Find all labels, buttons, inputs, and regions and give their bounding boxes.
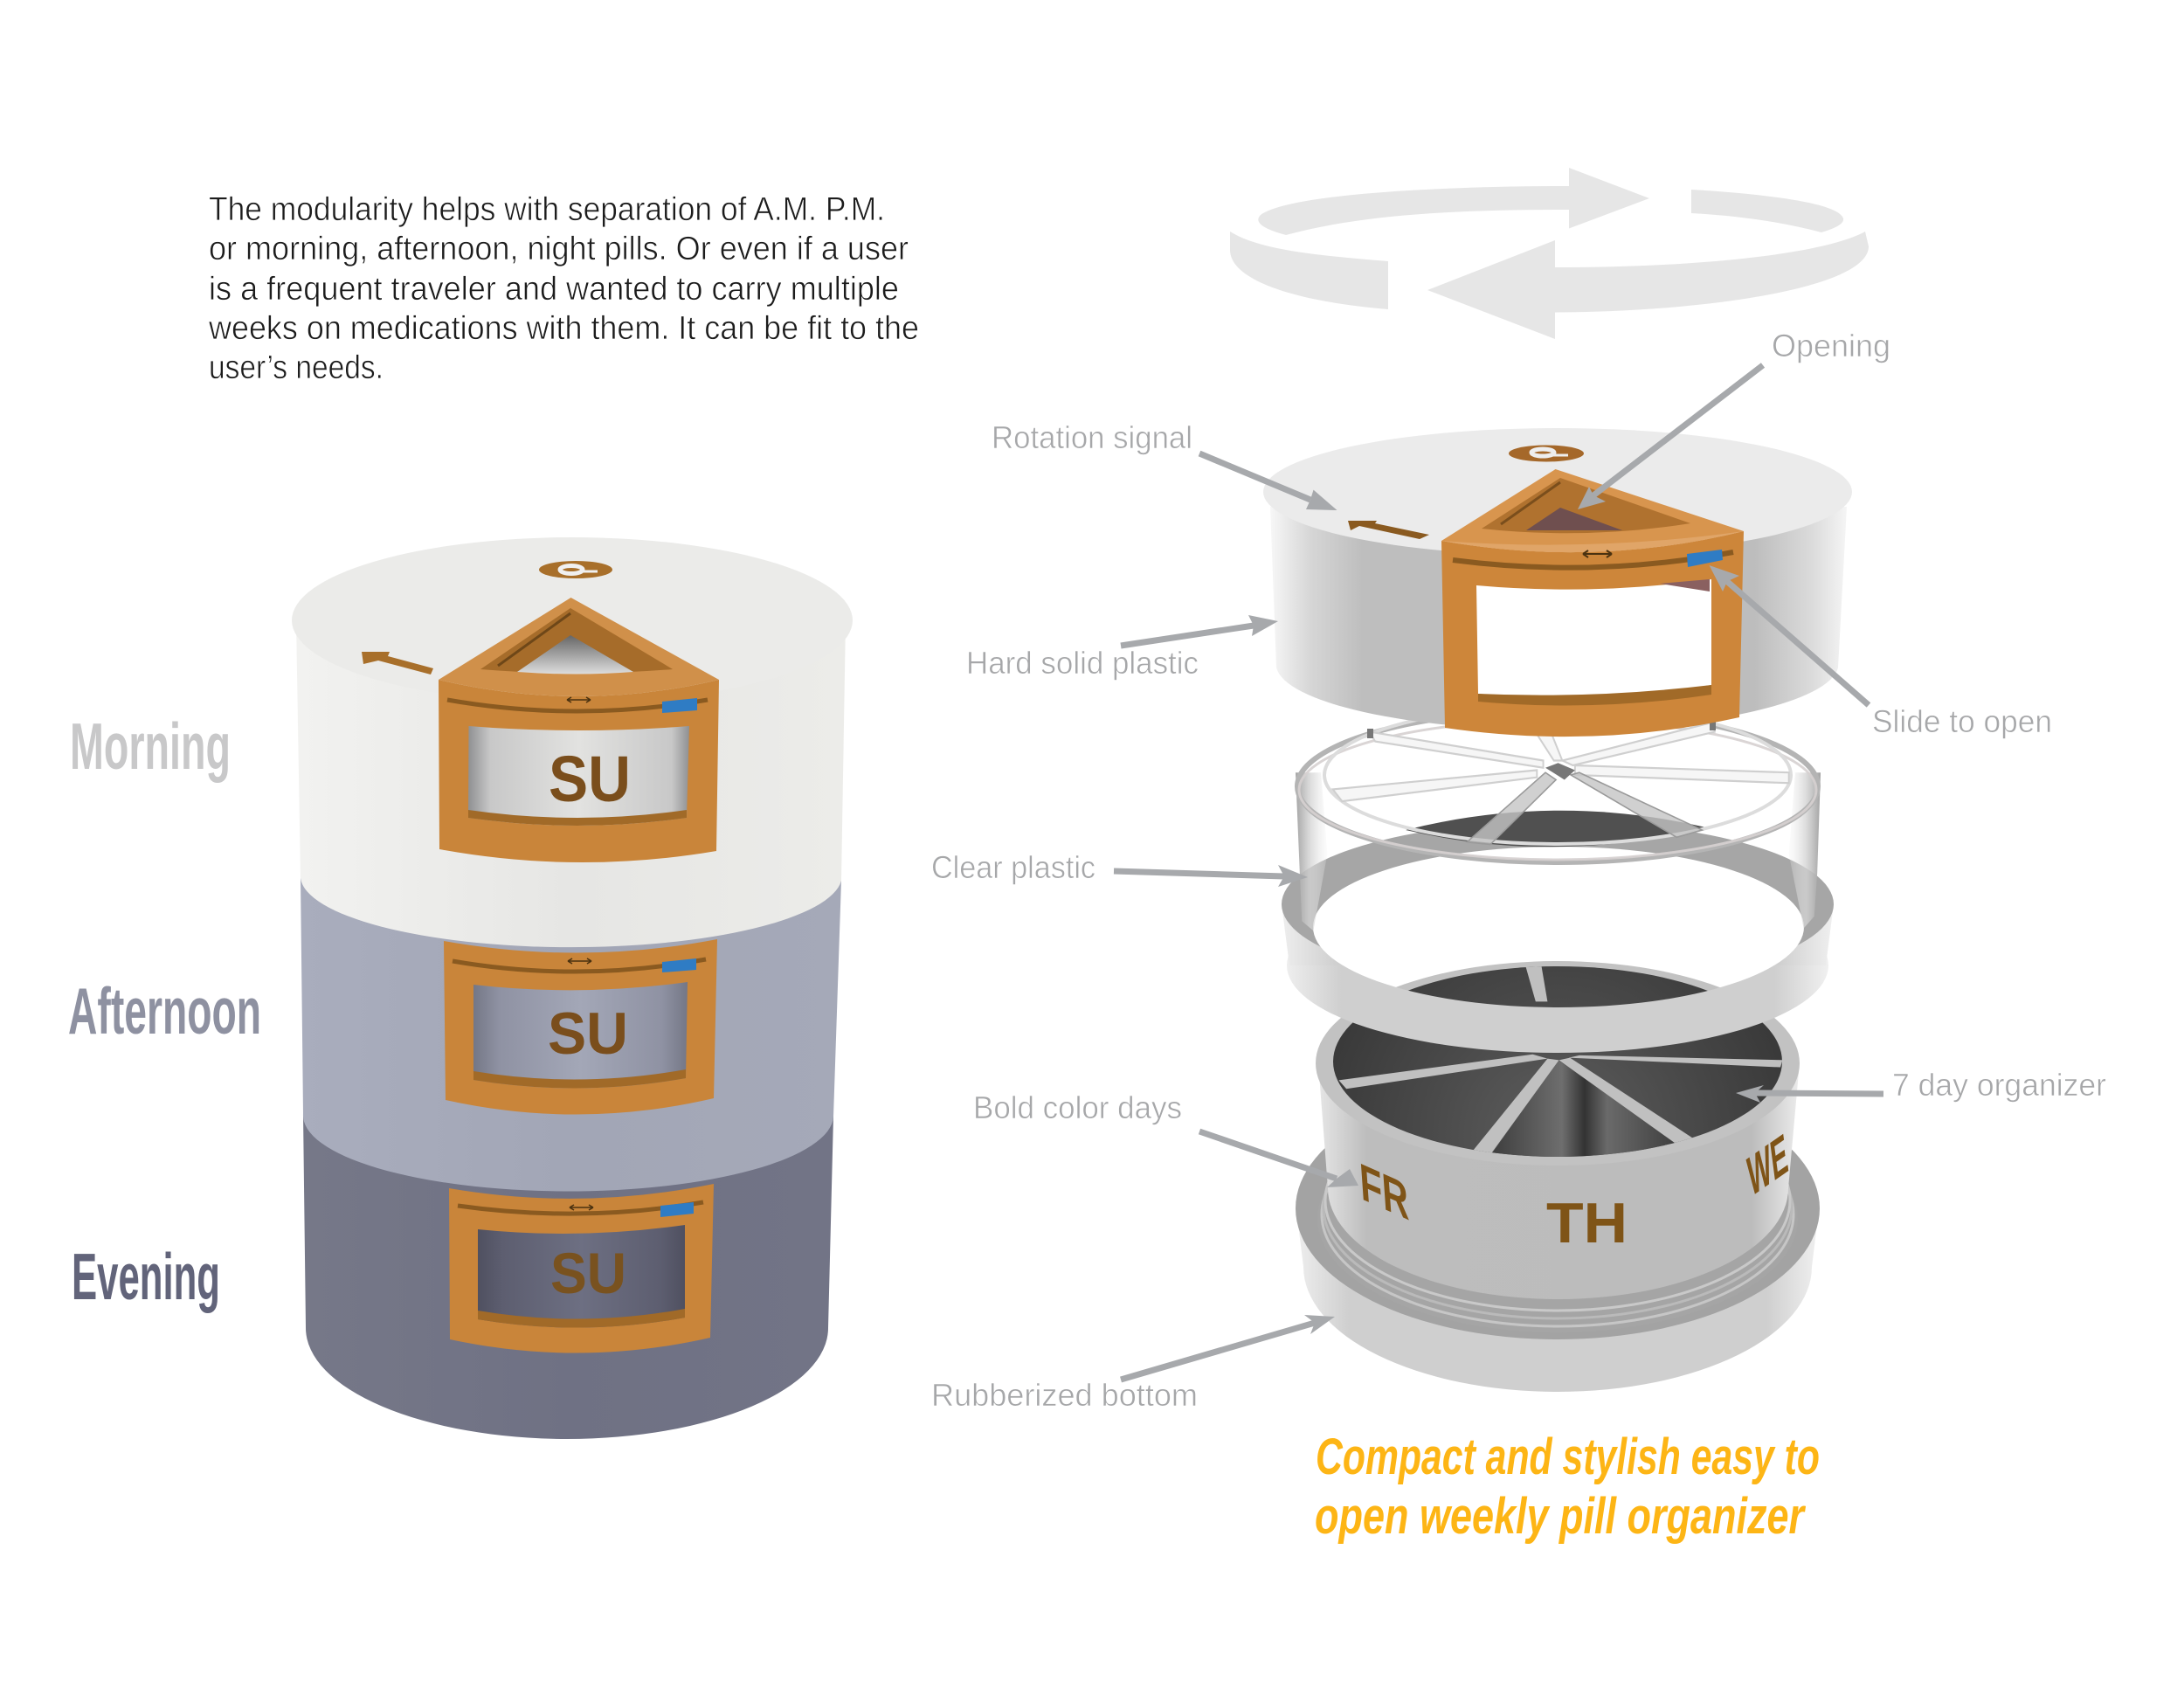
tier: morning body	[296, 620, 846, 947]
callout: Opening: Opening	[1772, 328, 1890, 363]
headline: Compact and stylish easy to	[1316, 1429, 1820, 1485]
morning door: SU	[549, 743, 631, 815]
callout: Clear plastic	[931, 849, 1308, 887]
callout: 7 day organizer: 7 day organizer	[1892, 1067, 2106, 1103]
7 day organizer	[1316, 961, 1800, 1299]
callout: Rubberized bottom: Rubberized bottom	[931, 1377, 1198, 1413]
headline	[1315, 1429, 1820, 1545]
connector ring	[1282, 821, 1834, 1053]
compartment dividers	[1338, 965, 1782, 1166]
callout: Rotation signal: Rotation signal	[992, 419, 1192, 455]
label: Evening: Evening	[72, 1240, 220, 1313]
day letters: WE	[1745, 1122, 1791, 1209]
description paragraph: or morning, afternoon, night pills. Or even if a user	[209, 231, 909, 267]
callout: Slide to open: Slide to open	[1872, 703, 2052, 739]
icon: lid rotation arrow	[1348, 521, 1429, 539]
label: Afternoon: Afternoon	[68, 974, 261, 1048]
callout: Rubberized bottom	[931, 1315, 1335, 1413]
callout: Bold color days	[973, 1090, 1358, 1187]
description paragraph	[208, 191, 919, 386]
afternoon door: SU	[548, 1000, 628, 1067]
clear lid spokes	[1333, 723, 1789, 844]
tier: afternoon body	[301, 878, 841, 1191]
afternoon door	[444, 939, 717, 1115]
day letters: TH	[1546, 1191, 1628, 1255]
top lid	[1263, 428, 1852, 737]
callout: Opening	[1578, 328, 1890, 509]
icon: rotation badge	[539, 561, 612, 578]
clear plastic cylinder	[1296, 706, 1821, 930]
callout: Clear plastic: Clear plastic	[931, 849, 1095, 885]
evening door	[449, 1184, 714, 1353]
callout: Hard solid plastic	[966, 615, 1278, 681]
callout: Rotation signal	[992, 419, 1337, 510]
tier: evening body	[303, 1114, 833, 1439]
description paragraph: weeks on medications with them. It can be fit to the	[208, 310, 919, 347]
icon: large rotation arrows	[1230, 168, 1869, 339]
description paragraph: The modularity helps with separation of A.M. P.M.	[209, 191, 885, 228]
evening door: SU	[550, 1241, 626, 1305]
icon: lid rotation badge	[1509, 446, 1584, 461]
label: Morning: Morning	[70, 709, 231, 783]
description paragraph: is a frequent traveler and wanted to carry multiple	[209, 271, 899, 308]
exploded organizer	[1263, 428, 1852, 1392]
day letters	[1358, 1122, 1791, 1255]
morning door	[439, 598, 719, 862]
callout: Slide to open	[1709, 565, 2052, 739]
top face	[292, 537, 853, 703]
rubberized bottom	[1296, 1077, 1820, 1392]
lid door	[1441, 469, 1744, 737]
stacked three-tier pill organizer	[292, 537, 853, 1439]
callout: Bold color days: Bold color days	[973, 1090, 1182, 1125]
day letters: FR	[1358, 1152, 1411, 1232]
callout: Hard solid plastic: Hard solid plastic	[966, 645, 1199, 681]
icon: rotation arrow	[362, 652, 433, 675]
callout: 7 day organizer	[1736, 1067, 2106, 1103]
headline: open weekly pill organizer	[1315, 1488, 1807, 1545]
description paragraph: user’s needs.	[209, 349, 384, 386]
